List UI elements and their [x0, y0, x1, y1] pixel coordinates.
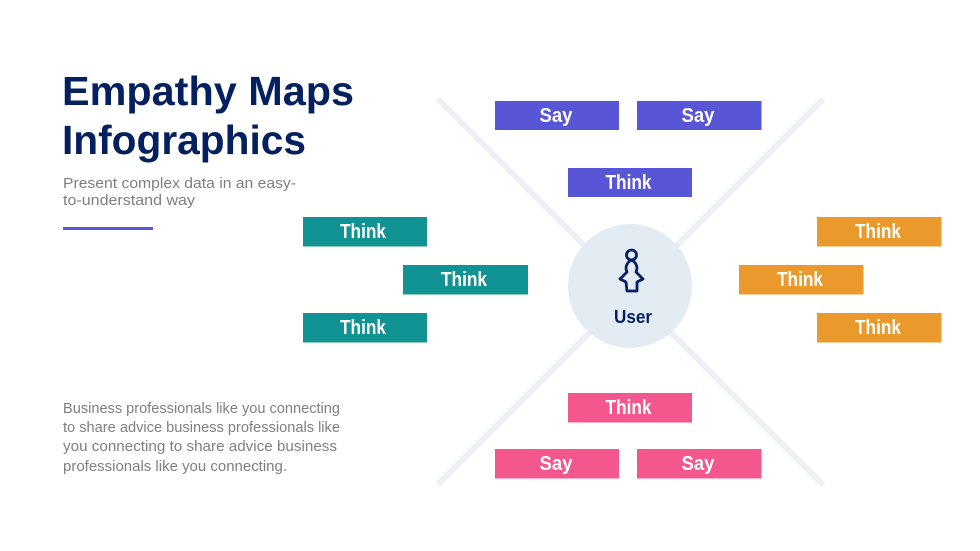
subtitle	[63, 175, 296, 209]
central user circle	[568, 224, 692, 348]
icon: user figure	[620, 250, 643, 291]
body text: Business professionals like you connecting	[63, 400, 340, 417]
subtitle: Present complex data in an easy-	[63, 175, 296, 192]
right think box 1: Think	[855, 221, 902, 243]
left think box 2	[403, 265, 528, 294]
title: Infographics	[62, 117, 306, 163]
bottom say box right	[637, 449, 762, 478]
top say box right	[637, 101, 762, 130]
left think box 1: Think	[340, 221, 387, 243]
left think box 1	[303, 217, 427, 246]
top say box left	[495, 101, 619, 130]
label: user: User	[614, 307, 652, 327]
left think box 3: Think	[340, 317, 387, 339]
right think box 1	[817, 217, 942, 246]
top say box right: Say	[682, 105, 715, 127]
diagonal cross lines	[438, 99, 823, 485]
left think box 3	[303, 313, 427, 342]
bottom think box	[568, 393, 692, 422]
body text: to share advice business professionals like	[63, 419, 340, 436]
left think box 2: Think	[441, 269, 488, 291]
title	[62, 68, 354, 163]
body text: professionals like you connecting.	[63, 458, 287, 475]
right think box 2: Think	[777, 269, 824, 291]
title: Empathy Maps	[62, 68, 354, 114]
right think box 3: Think	[855, 317, 902, 339]
accent underline	[63, 227, 153, 230]
bottom say box left	[495, 449, 619, 478]
bottom say box left: Say	[540, 453, 573, 475]
body text	[63, 400, 340, 475]
right think box 2	[739, 265, 864, 294]
top say box left: Say	[540, 105, 573, 127]
top think box: Think	[606, 172, 652, 194]
bottom think box: Think	[606, 397, 652, 419]
body text: you connecting to share advice business	[63, 438, 337, 455]
top think box	[568, 168, 692, 197]
bottom say box right: Say	[682, 453, 715, 475]
right think box 3	[817, 313, 942, 342]
subtitle: to-understand way	[63, 192, 196, 209]
